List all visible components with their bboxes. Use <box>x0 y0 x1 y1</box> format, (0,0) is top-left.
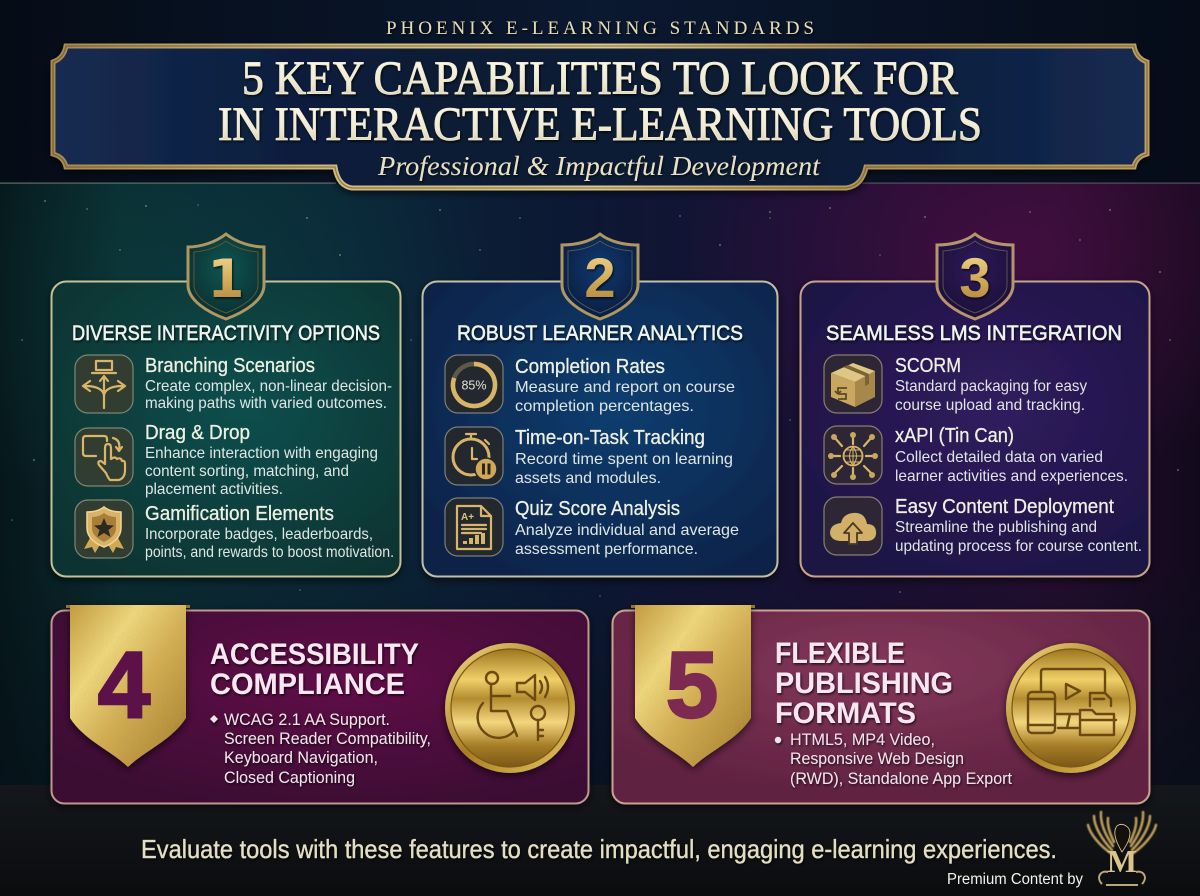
panel 5: Flexible Publishing Formats <box>612 605 1150 804</box>
item: Gamification Elements: points, and rewards to boost motivation. <box>145 544 394 561</box>
icon: cloud upload <box>824 497 882 555</box>
ribbon badge 5 <box>631 605 755 767</box>
item: Time-on-Task Tracking <box>445 427 733 487</box>
item: Branching Scenarios <box>75 355 392 413</box>
panel 3: Seamless LMS Integration <box>800 234 1150 576</box>
item: Easy Content Deployment: updating process for course content. <box>895 538 1142 555</box>
heading: FORMATS <box>775 697 916 730</box>
ribbon badge 4: 4 <box>98 632 150 737</box>
icon: quiz report <box>445 498 503 556</box>
item: xAPI: xAPI (Tin Can) <box>895 425 1014 447</box>
item: Easy Content Deployment: Streamline the publishing and <box>895 519 1097 536</box>
logo: phoenix monogram <box>1088 812 1156 885</box>
footer credit: Premium Content by <box>947 871 1083 888</box>
feature list: Keyboard Navigation, <box>224 748 378 767</box>
feature list: HTML5, MP4 Video, <box>790 730 935 749</box>
item: SCORM: Standard packaging for easy <box>895 378 1087 395</box>
item: Quiz Score Analysis: Analyze individual and average <box>515 522 739 539</box>
item: Drag and Drop: content sorting, matching, and <box>145 463 349 480</box>
item: Branching Scenarios: Create complex, non-linear decision- <box>145 378 392 395</box>
item: Easy Content Deployment: Easy Content Deployment <box>895 496 1114 518</box>
subtitle: Professional & Impactful Development <box>377 151 822 181</box>
heading: FLEXIBLE <box>775 637 905 670</box>
icon: package box <box>824 355 882 413</box>
main title: IN INTERACTIVE E-LEARNING TOOLS <box>218 98 982 151</box>
item: Branching Scenarios: making paths with varied outcomes. <box>145 395 387 412</box>
medallion: device icons <box>1006 643 1136 773</box>
panel 4: Accessibility Compliance <box>52 605 588 804</box>
main title <box>218 52 982 151</box>
icon: stopwatch <box>445 427 503 485</box>
icon: globe network <box>824 426 882 484</box>
item: Drag and Drop: Enhance interaction with engaging <box>145 445 378 462</box>
icon: 85 percent ring <box>445 355 503 413</box>
shield badge 2 <box>562 234 638 319</box>
item: xAPI <box>824 425 1128 485</box>
shield badge 3 <box>937 234 1013 319</box>
heading: COMPLIANCE <box>210 668 405 701</box>
item: Completion Rates: Completion Rates <box>515 356 665 378</box>
item: Gamification Elements <box>75 500 394 561</box>
medallion: accessibility icons <box>445 643 575 773</box>
heading: ACCESSIBILITY <box>210 638 419 671</box>
item: Gamification Elements: Gamification Elements <box>145 503 334 525</box>
eyebrow: Phoenix E-Learning Standards: PHOENIX E-LEARNING STANDARDS <box>386 18 814 39</box>
item: Time-on-Task Tracking: assets and modules. <box>515 470 661 487</box>
shield badge 3: 3 <box>959 246 991 309</box>
feature list: Responsive Web Design <box>790 749 964 768</box>
icon: drag hand <box>75 428 133 486</box>
heading: PUBLISHING <box>775 667 953 700</box>
icon: branching arrows <box>75 355 133 413</box>
item: Drag and Drop: Drag & Drop <box>145 422 250 444</box>
main title: 5 KEY CAPABILITIES TO LOOK FOR <box>242 52 958 105</box>
ribbon badge 5: 5 <box>666 632 718 737</box>
item: Drag and Drop: placement activities. <box>145 481 283 498</box>
item: Quiz Score Analysis: assessment performance. <box>515 541 698 558</box>
icon: shield with star <box>75 500 133 558</box>
item: xAPI: learner activities and experiences. <box>895 468 1128 485</box>
heading: DIVERSE INTERACTIVITY OPTIONS <box>72 322 380 345</box>
panel 2: Robust Learner Analytics <box>422 234 778 576</box>
feature list <box>210 710 431 787</box>
panel 1: Diverse Interactivity Options <box>52 234 400 576</box>
item: SCORM <box>824 355 1087 414</box>
item: Completion Rates: Measure and report on course <box>515 379 735 396</box>
feature list <box>775 730 1012 788</box>
item: Time-on-Task Tracking: Record time spent on learning <box>515 451 733 468</box>
footer tagline: Evaluate tools with these features to create impactful, engaging e-learning experiences. <box>141 834 1057 864</box>
shield badge 1 <box>188 234 264 319</box>
item: Completion Rates <box>445 355 735 415</box>
feature list: Screen Reader Compatibility, <box>224 729 431 748</box>
item: Quiz Score Analysis: Quiz Score Analysis <box>515 498 680 520</box>
shield badge 2: 2 <box>584 246 616 309</box>
feature list: (RWD), Standalone App Export <box>790 769 1012 788</box>
heading <box>210 638 419 701</box>
item: Time-on-Task Tracking: Time-on-Task Tracking <box>515 427 705 449</box>
logo: phoenix monogram: M <box>1107 843 1137 879</box>
item: Quiz Score Analysis <box>445 498 739 558</box>
item: SCORM: course upload and tracking. <box>895 397 1085 414</box>
icon: quiz report: A+ <box>461 512 474 523</box>
item: Gamification Elements: Incorporate badges, leaderboards, <box>145 526 373 543</box>
item: Easy Content Deployment <box>824 496 1142 555</box>
heading: ROBUST LEARNER ANALYTICS <box>457 322 743 345</box>
item: SCORM: SCORM <box>895 355 961 377</box>
item: xAPI: Collect detailed data on varied <box>895 449 1103 466</box>
icon: 85 percent ring: 85% <box>461 378 487 392</box>
item: Branching Scenarios: Branching Scenarios <box>145 355 315 377</box>
shield badge 1: 1 <box>208 249 244 310</box>
ribbon badge 4 <box>66 605 190 767</box>
feature list: WCAG 2.1 AA Support. <box>224 710 390 729</box>
heading <box>775 637 953 730</box>
feature list: Closed Captioning <box>224 768 355 787</box>
title banner <box>53 46 1147 188</box>
item: Drag and Drop <box>75 422 378 498</box>
item: Completion Rates: completion percentages. <box>515 398 694 415</box>
heading: SEAMLESS LMS INTEGRATION <box>826 322 1122 345</box>
